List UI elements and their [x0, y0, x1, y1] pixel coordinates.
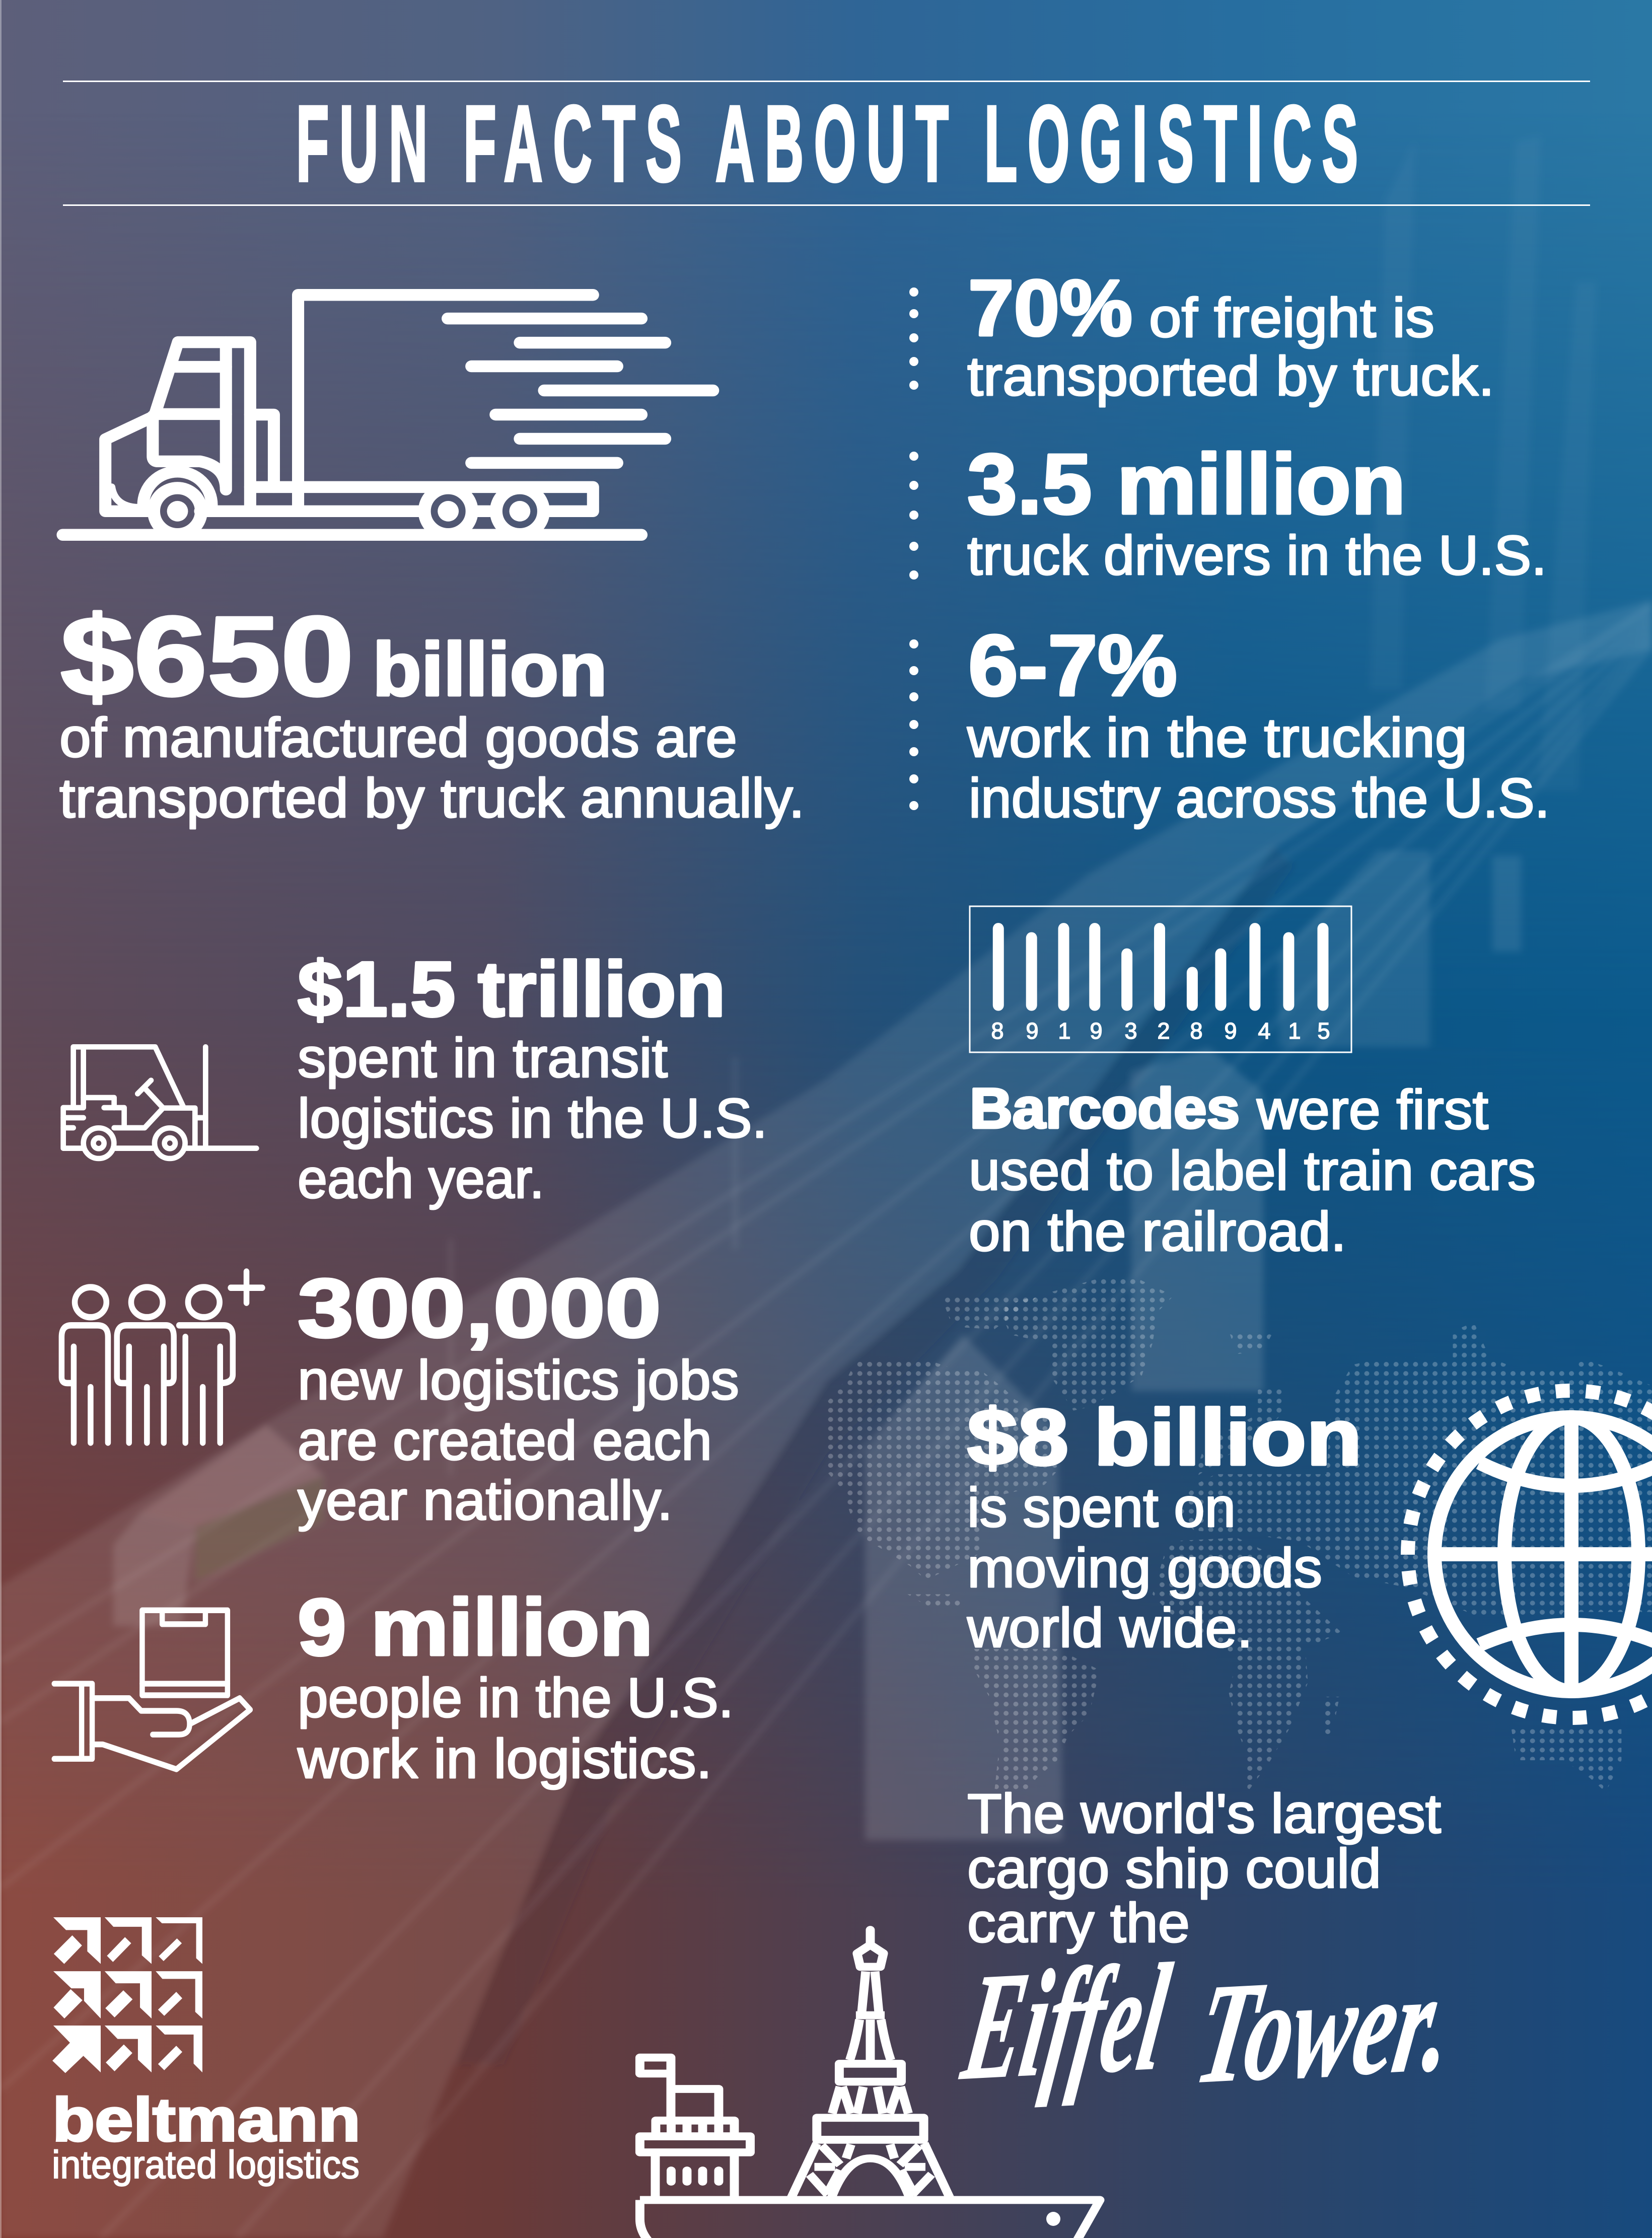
stat: 70% of freight: of freight is	[1149, 287, 1434, 349]
stat: $8 billion: is spent on	[967, 1477, 1236, 1539]
logo: wordmark: integrated logistics	[52, 2142, 360, 2187]
stat: 9 million	[297, 1582, 734, 1790]
fact: largest cargo ship	[967, 1783, 1441, 1954]
icon: hand holding box	[54, 1610, 250, 1769]
icon: globe	[1408, 1391, 1652, 1718]
fact: barcodes: were first	[1256, 1079, 1488, 1141]
stat: $1.5 trillion	[298, 946, 767, 1210]
stat: 9 million: people in the U.S.	[298, 1667, 734, 1729]
icon: workers plus	[61, 1272, 262, 1442]
fact: largest cargo ship: carry the	[967, 1892, 1190, 1954]
stat: 70% of freight: 70%	[968, 264, 1132, 352]
dotted separators	[909, 287, 918, 810]
background dotted world map	[826, 1278, 1652, 1792]
fact: largest cargo ship: cargo ship could	[967, 1838, 1381, 1900]
icon: cargo ship with Eiffel Tower	[640, 1930, 1100, 2238]
stat: 6-7%: industry across the U.S.	[969, 767, 1550, 829]
logo: wordmark: beltmann	[52, 2085, 361, 2154]
stat: 300,000: year nationally.	[298, 1470, 673, 1532]
stat: 300,000: 300,000	[298, 1262, 661, 1354]
icon: speeding truck	[62, 295, 713, 535]
left edge strip	[0, 0, 2, 2238]
stat: $1.5 trillion: logistics in the U.S.	[298, 1088, 767, 1149]
stat: $1.5 trillion: spent in transit	[298, 1027, 668, 1089]
stat: 300,000	[298, 1262, 739, 1532]
stat: 6-7%: 6-7%	[968, 617, 1177, 714]
stat: 9 million: 9 million	[298, 1582, 653, 1672]
stat: $8 billion	[967, 1393, 1362, 1659]
fact: largest cargo ship: The world's largest	[967, 1783, 1441, 1845]
stat: 300,000: are created each	[298, 1410, 712, 1472]
icon: barcode: 89193289415	[991, 1018, 1330, 1044]
icon: forklift	[63, 1047, 256, 1159]
stat: 300,000: new logistics jobs	[298, 1349, 739, 1411]
stat: 3.5 million: truck drivers in the U.S.	[967, 525, 1547, 587]
stat: $1.5 trillion: $1.5 trillion	[298, 946, 726, 1033]
stat: $650 billion: billion	[373, 627, 607, 711]
icon: barcode	[970, 906, 1351, 1052]
stat: 3.5 million	[967, 437, 1547, 587]
stat: $650 billion	[59, 593, 805, 829]
stat: 6-7%: work in the trucking	[967, 707, 1467, 769]
stat: 70% of freight	[967, 264, 1494, 407]
stat: 9 million: work in logistics.	[297, 1728, 712, 1790]
script text: Eiffel Tower: Tower.	[1187, 1942, 1464, 2113]
title: FUN FACTS ABOUT LOGISTICS	[296, 83, 1358, 204]
tower spire	[850, 1930, 891, 2060]
stat: $650 billion: of manufactured goods are	[59, 707, 737, 769]
script text: Eiffel Tower: Eiffel	[953, 1932, 1180, 2112]
stat: 3.5 million: 3.5 million	[967, 437, 1406, 532]
fact: barcodes	[969, 1077, 1536, 1263]
logo: wordmark	[52, 2085, 361, 2187]
stat: $650 billion: transported by truck annually.	[59, 767, 805, 829]
stat: $8 billion: $8 billion	[967, 1393, 1362, 1482]
fact: barcodes: on the railroad.	[969, 1201, 1346, 1263]
title	[63, 81, 1590, 206]
ship porthole	[1046, 2212, 1060, 2226]
stat: 6-7%	[967, 617, 1550, 829]
logo: beltmann arrows	[52, 1917, 202, 2073]
stat: $8 billion: moving goods	[967, 1537, 1322, 1599]
stat: $650 billion: $650	[60, 593, 354, 719]
fact: barcodes: used to label train cars	[969, 1140, 1536, 1202]
stat: 70% of freight: transported by truck.	[967, 345, 1494, 407]
stat: $8 billion: world wide.	[967, 1597, 1253, 1659]
stat: $1.5 trillion: each year.	[298, 1148, 544, 1210]
tower platforms and lattice	[791, 2064, 950, 2198]
fact: barcodes: Barcodes	[970, 1077, 1240, 1140]
